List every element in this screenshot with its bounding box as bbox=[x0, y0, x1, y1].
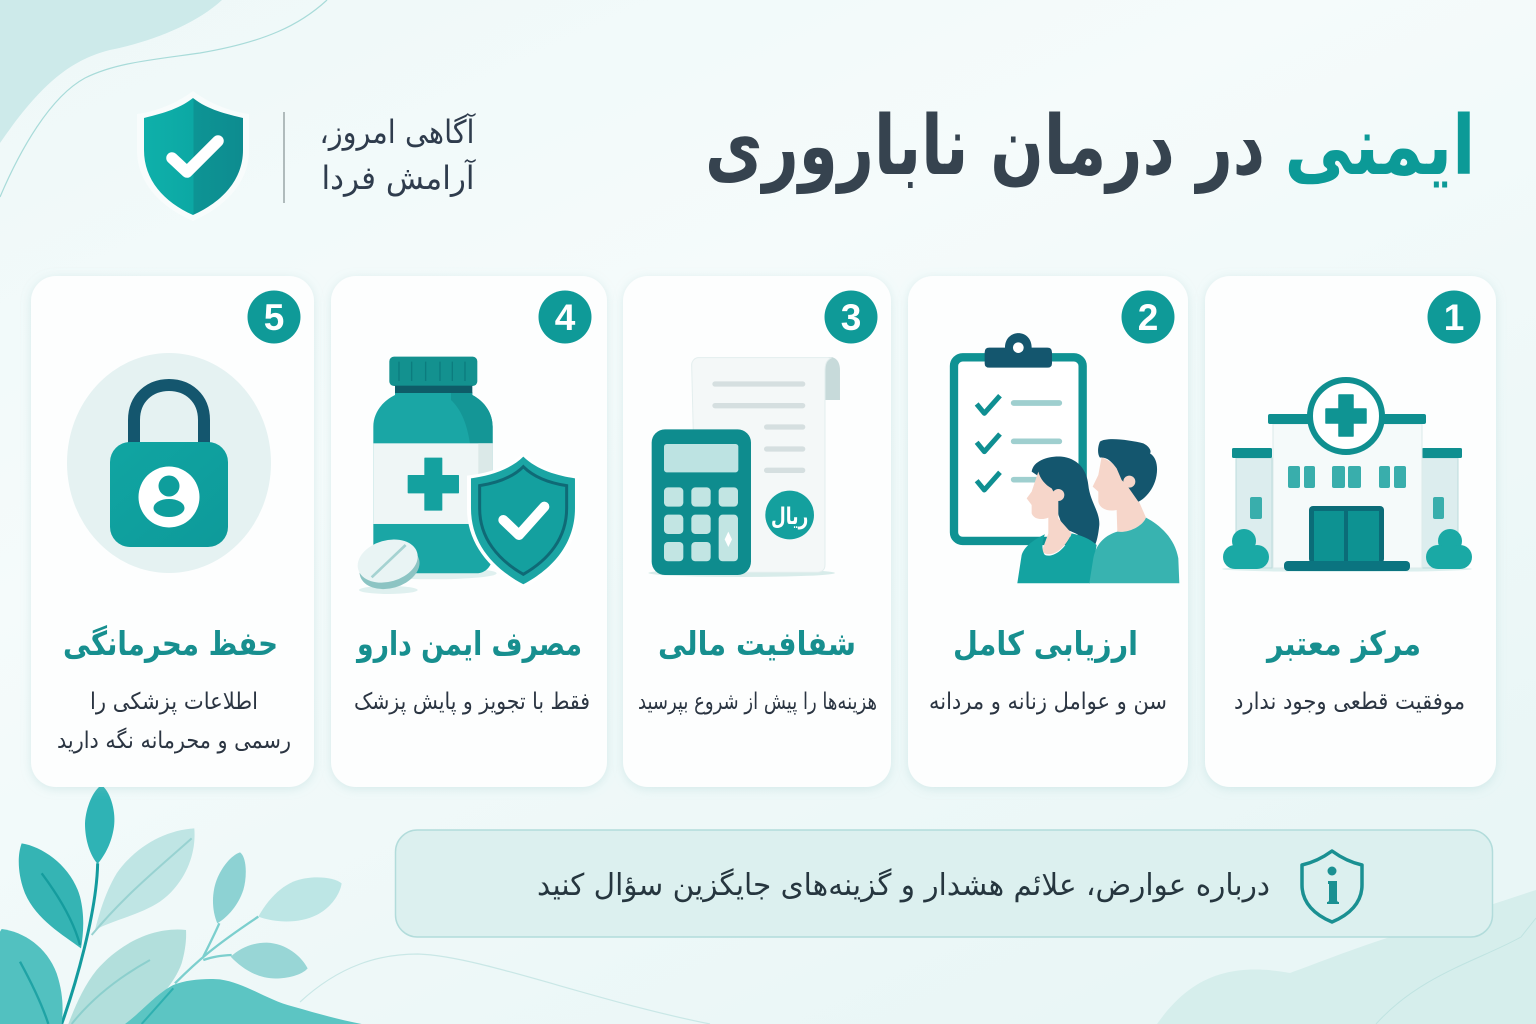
title: ایمنی bbox=[1284, 99, 1476, 194]
divider bbox=[283, 112, 285, 203]
icon: bottle, pill and shield bbox=[353, 357, 579, 596]
icon: lock bbox=[67, 353, 271, 573]
card title: مصرف ایمن دارو bbox=[355, 624, 582, 664]
panel: card 1 accredited center bbox=[1205, 276, 1496, 787]
number badge 5 bbox=[248, 290, 300, 344]
tagline: آرامش فردا bbox=[322, 158, 477, 197]
panel: card 2 assessment bbox=[908, 276, 1188, 787]
panel: card 5 privacy bbox=[31, 276, 314, 787]
number badge 1 bbox=[1428, 290, 1480, 344]
card description bbox=[57, 689, 291, 754]
number badge 3 bbox=[824, 290, 878, 344]
number badge 1: 1 bbox=[1444, 297, 1464, 338]
icon: calculator and receipt: ریال bbox=[771, 502, 808, 530]
number badge 4: 4 bbox=[555, 297, 576, 338]
number badge 3: 3 bbox=[841, 297, 861, 338]
icon: calculator and receipt bbox=[648, 357, 840, 577]
card description: رسمی و محرمانه نگه دارید bbox=[57, 727, 291, 754]
card description: موفقیت قطعی وجود ندارد bbox=[1234, 689, 1465, 715]
card description: اطلاعات پزشکی را bbox=[90, 689, 258, 715]
number badge 2 bbox=[1122, 290, 1174, 344]
callout: bottom advice bbox=[396, 830, 1492, 937]
icon: clipboard and couple bbox=[954, 333, 1179, 583]
decorative leaves bottom-left bbox=[0, 785, 362, 1024]
icon: header shield with check bbox=[137, 91, 249, 221]
number badge 4 bbox=[538, 290, 592, 344]
card title: ارزیابی کامل bbox=[953, 624, 1138, 663]
callout text: درباره عوارض، علائم هشدار و گزینه‌های جایگزین سؤال کنید bbox=[537, 868, 1270, 903]
card title: مرکز معتبر bbox=[1265, 624, 1421, 664]
icon: info shield bbox=[1302, 851, 1362, 922]
card title: حفظ محرمانگی bbox=[63, 624, 278, 664]
tagline bbox=[320, 112, 477, 197]
card title: شفافیت مالی bbox=[658, 624, 856, 663]
number badge 5: 5 bbox=[264, 297, 284, 338]
panel: card 4 medication bbox=[331, 276, 607, 787]
number badge 2: 2 bbox=[1138, 297, 1158, 338]
card description: هزینه‌ها را پیش از شروع بپرسید bbox=[638, 689, 877, 715]
panel: card 3 finance bbox=[623, 276, 891, 787]
icon: hospital bbox=[1222, 380, 1472, 572]
card description: فقط با تجویز و پایش پزشک bbox=[354, 689, 590, 715]
title: در درمان ناباروری bbox=[705, 99, 1265, 195]
tagline: آگاهی امروز، bbox=[320, 112, 476, 151]
card description: سن و عوامل زنانه و مردانه bbox=[929, 689, 1167, 715]
